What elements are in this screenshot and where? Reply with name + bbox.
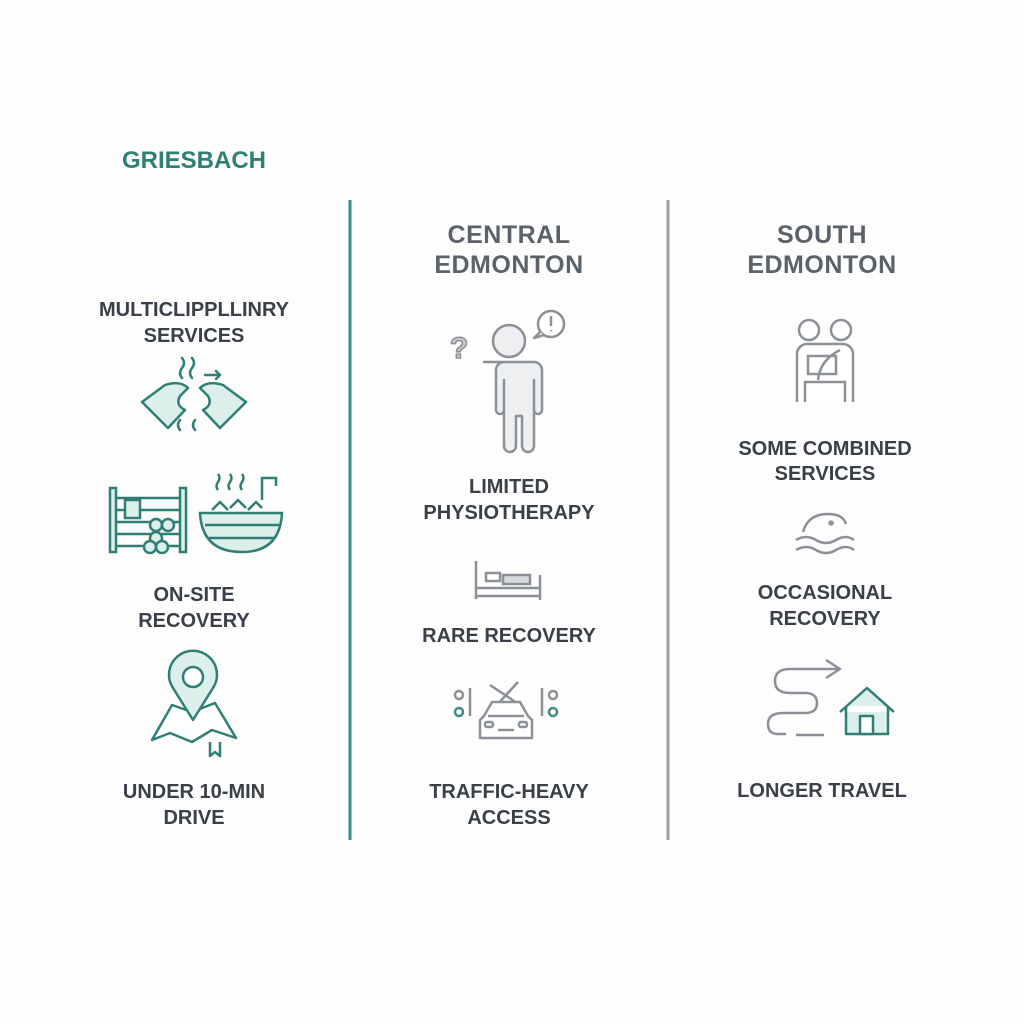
icon: sauna and bowl	[110, 474, 282, 553]
label: traffic-heavy access	[429, 781, 589, 829]
label: on-site recovery: ON-SITE	[153, 584, 235, 606]
heading: South Edmonton	[747, 221, 897, 279]
label: limited physiotherapy: LIMITED	[469, 476, 549, 498]
icon: two people	[797, 320, 853, 402]
label: some combined services: SOME COMBINED	[738, 438, 912, 460]
icon: bed	[476, 561, 540, 600]
label: under 10-min drive: UNDER 10-MIN	[123, 781, 265, 803]
heading: South Edmonton: EDMONTON	[747, 251, 897, 279]
label: under 10-min drive: DRIVE	[163, 807, 225, 829]
label: on-site recovery: RECOVERY	[138, 610, 250, 632]
label: on-site recovery	[138, 584, 250, 632]
icon: route to house	[768, 660, 894, 735]
heading: South Edmonton: SOUTH	[777, 221, 867, 249]
label: some combined services: SERVICES	[775, 463, 875, 485]
heading: Central Edmonton: CENTRAL	[448, 221, 570, 249]
label: limited physiotherapy	[423, 476, 595, 524]
icon: wave	[796, 514, 854, 553]
label: some combined services	[738, 438, 912, 485]
label: longer travel: LONGER TRAVEL	[737, 780, 907, 802]
icon: map pin	[152, 651, 236, 756]
label: occasional recovery: OCCASIONAL	[758, 582, 892, 604]
heading: Central Edmonton: EDMONTON	[434, 251, 584, 279]
icon: traffic car	[455, 682, 557, 738]
label: multidisciplinary services: MULTICLIPPLLINRY	[99, 299, 290, 321]
icon: confused person	[450, 311, 564, 452]
label: multidisciplinary services: SERVICES	[144, 325, 244, 347]
title: Griesbach: GRIESBACH	[122, 147, 266, 174]
label: rare recovery: RARE RECOVERY	[422, 625, 597, 647]
icon: confused person: ?	[450, 332, 468, 365]
label: occasional recovery: RECOVERY	[769, 608, 881, 630]
label: limited physiotherapy: PHYSIOTHERAPY	[423, 502, 595, 524]
label: under 10-min drive	[123, 781, 265, 829]
label: multidisciplinary services	[99, 299, 290, 347]
label: occasional recovery	[758, 582, 892, 630]
label: traffic-heavy access: ACCESS	[467, 807, 551, 829]
label: traffic-heavy access: TRAFFIC-HEAVY	[429, 781, 589, 803]
icon: hands	[142, 358, 246, 430]
heading: Central Edmonton	[434, 221, 584, 279]
